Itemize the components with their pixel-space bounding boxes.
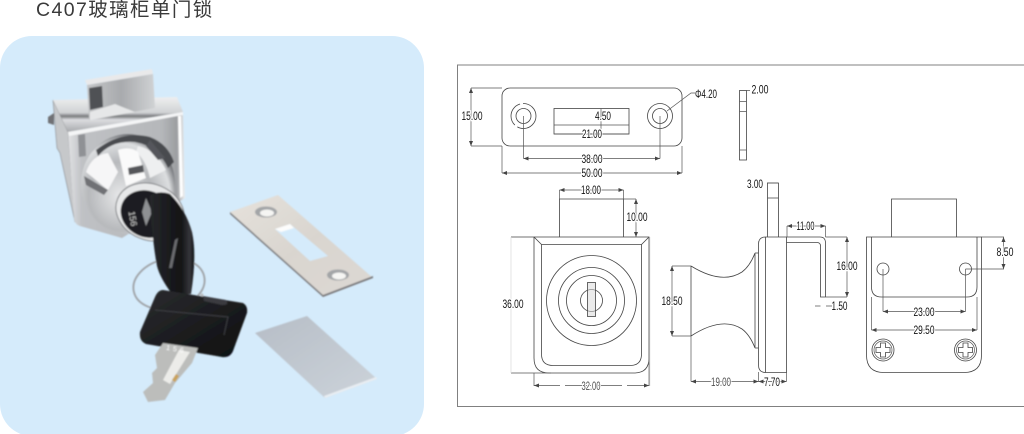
strike plate [230,195,373,297]
key ring [129,252,209,316]
dimension 50.00: 50.00 [582,168,602,180]
dimension 19.00: 19.00 [711,377,731,389]
dimension 21.00: 21.00 [582,129,602,141]
dimension 4.50: 4.50 [595,111,611,123]
drawing: strike plate top view [462,88,717,180]
dimension 7.70: 7.70 [764,377,780,389]
dimension 2.00: 2.00 [752,84,768,96]
dimension 32.00: 32.00 [582,381,600,393]
dimension 18.00 [560,185,624,197]
panel: product photo background [0,36,424,434]
drawing: lock side view [662,179,858,389]
dimension 18.00: 18.00 [581,185,601,197]
drawing: lock rear view [866,199,1014,372]
dimension 8.50 [996,237,1014,269]
dimension 10.00: 10.00 [626,212,648,224]
drawing: strike plate side view [740,84,768,160]
dimension 29.50: 29.50 [914,325,934,337]
dimension 23.00 [883,307,966,319]
dimension hole diameter [667,89,717,111]
dimension 8.50: 8.50 [996,247,1014,259]
dimension 18.50 [662,266,682,336]
dimension 16.00: 16.00 [836,261,858,273]
dimension 15.00 [462,88,482,146]
key head [140,290,247,357]
panel: technical drawing frame [458,65,1024,406]
dimension 29.50 [872,325,977,337]
drawing: lock front view [502,185,650,393]
dimension 19.00 [691,377,758,389]
dimension 23.00: 23.00 [914,307,934,319]
screw right [954,339,976,361]
dimension 18.50: 18.50 [662,296,682,308]
dimension 3.00: 3.00 [747,179,763,191]
dimension 15.00: 15.00 [462,111,482,123]
gasket strip [255,316,377,398]
sliding bolt [85,69,155,120]
cylinder face with number: 156 [127,210,139,227]
dimension 16.00 [836,237,858,297]
key blade [143,343,198,402]
key bow upper [150,192,194,294]
screw left [872,339,894,361]
dimension 32.00 [534,381,649,393]
knob [81,134,193,251]
dimension 36.00: 36.00 [502,299,524,311]
dimension 38.00 [524,154,660,166]
dimension 10.00 [626,199,648,237]
dimension 11.00: 11.00 [796,221,814,233]
product illustration: glass cabinet lock [48,69,377,402]
key blade: 156 [166,345,187,355]
dimension hole diameter: Φ4.20 [695,89,717,101]
lock body [48,97,185,238]
dimension 1.50: 1.50 [832,301,848,313]
dimension 38.00: 38.00 [582,154,602,166]
